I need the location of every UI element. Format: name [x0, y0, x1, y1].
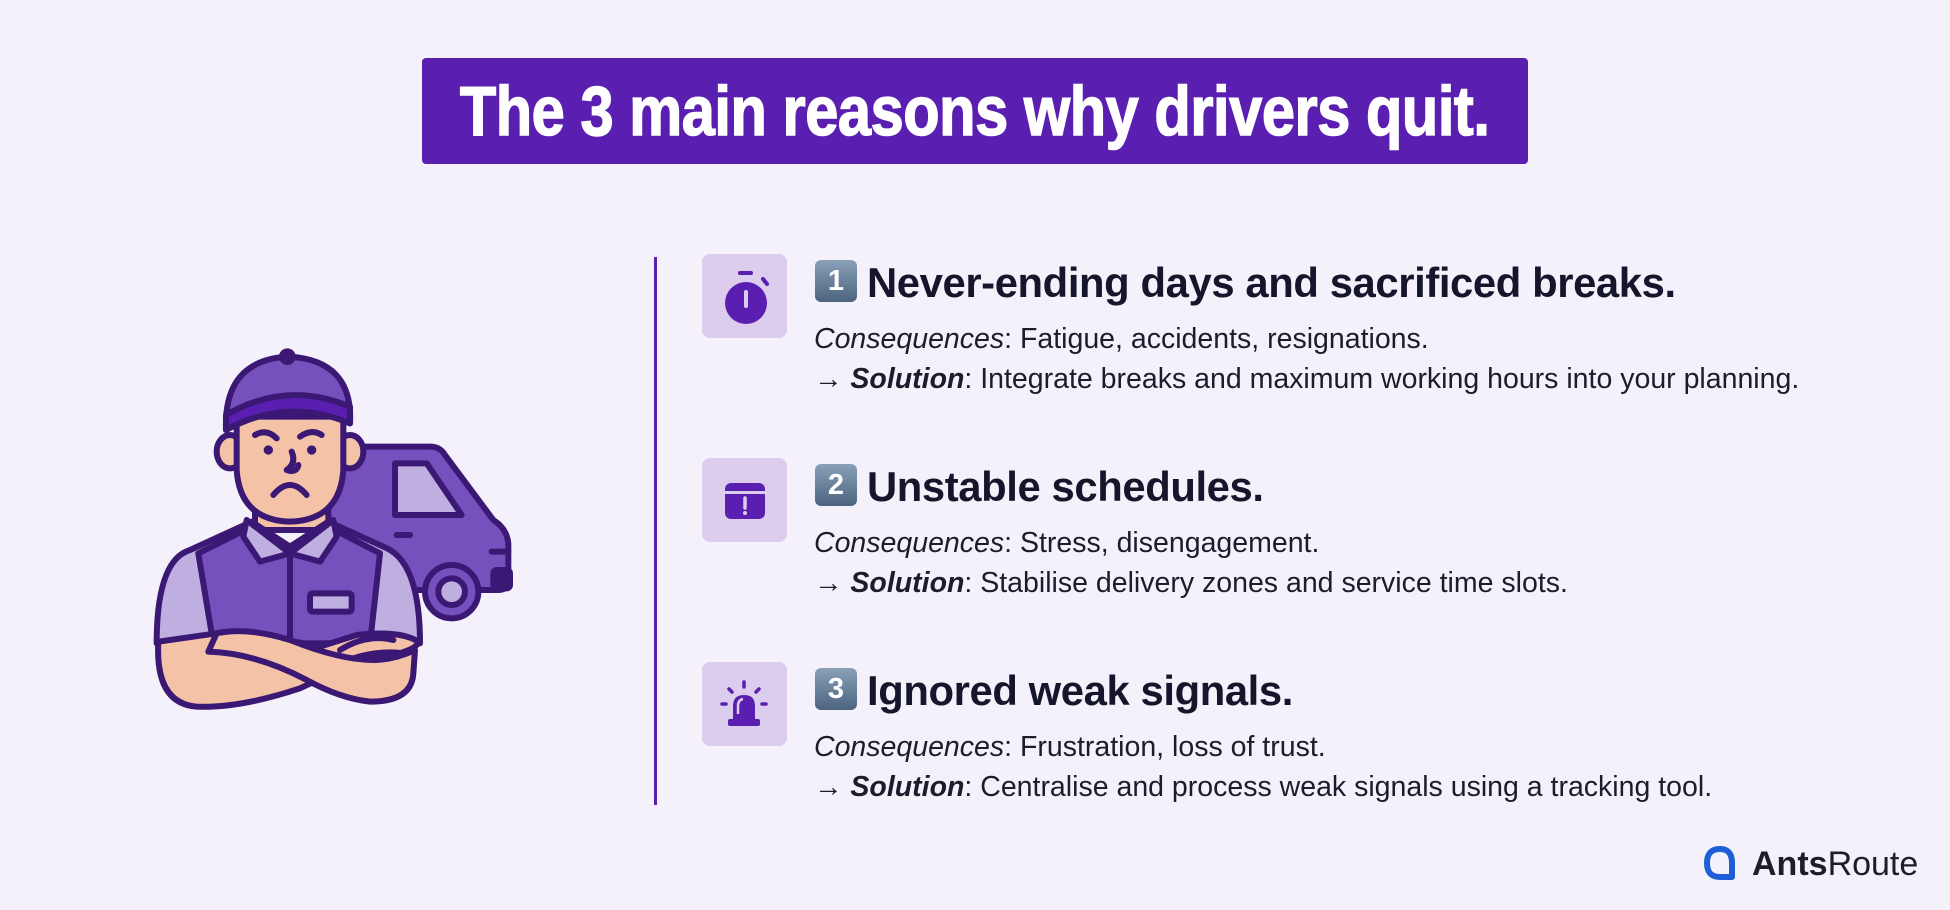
text 3 — [814, 731, 1712, 803]
text 2 — [814, 527, 1568, 599]
item 2 icon: calendar alert — [702, 458, 787, 542]
neck and face — [255, 497, 328, 530]
van — [327, 447, 510, 618]
title: The 3 main reasons why drivers quit. — [460, 72, 1490, 150]
heading 1: 1 — [828, 265, 844, 297]
logo: AntsRoute: AntsRoute — [1752, 845, 1918, 883]
heading 2: Unstable schedules. — [867, 463, 1264, 510]
heading 3: 3 — [828, 673, 844, 705]
cap — [226, 357, 350, 430]
text 3: → Solution: Centralise and process weak signals using a tracking tool. — [814, 771, 1712, 803]
item 3 icon: siren — [702, 662, 787, 746]
body — [157, 522, 420, 643]
face details — [255, 432, 277, 438]
text 3: Consequences: Frustration, loss of trust. — [814, 731, 1326, 763]
heading 2: 2 — [828, 469, 844, 501]
ears — [217, 435, 243, 468]
heading 1: Never-ending days and sacrificed breaks. — [867, 259, 1676, 306]
text 1: → Solution: Integrate breaks and maximum working hours into your planning. — [814, 363, 1799, 395]
title — [422, 58, 1528, 164]
text 2: Consequences: Stress, disengagement. — [814, 527, 1319, 559]
arms — [158, 633, 418, 707]
text 1 — [814, 323, 1799, 395]
text 2: → Solution: Stabilise delivery zones and service time slots. — [814, 567, 1568, 599]
heading 3: Ignored weak signals. — [867, 667, 1293, 714]
divider line — [654, 257, 657, 805]
icon: stopwatch — [702, 254, 787, 338]
illustration: driver with van — [154, 348, 513, 710]
text 1: Consequences: Fatigue, accidents, resignations. — [814, 323, 1429, 355]
